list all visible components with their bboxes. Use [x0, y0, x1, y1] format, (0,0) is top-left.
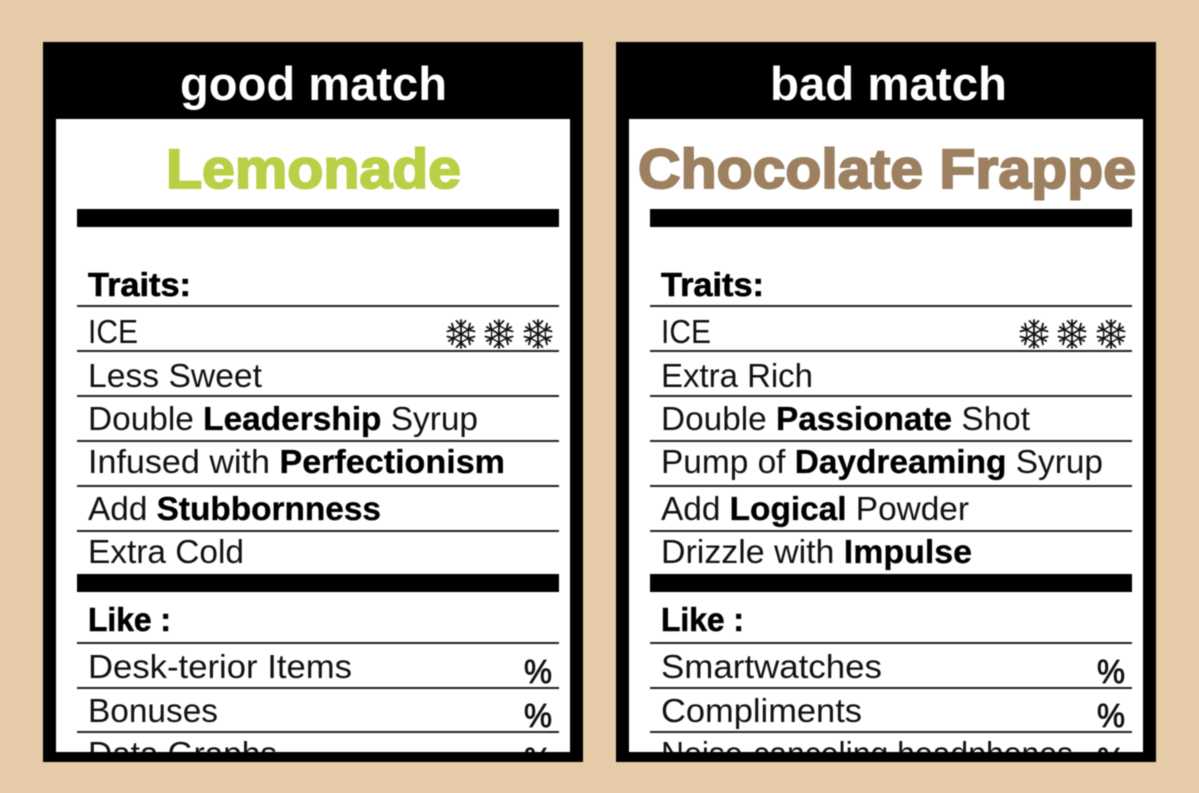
traits rules [650, 306, 1132, 531]
panel background [629, 119, 1143, 752]
like list [649, 606, 1133, 753]
panel frame [616, 42, 1156, 762]
traits list [77, 266, 559, 570]
percent sign row 1: % [524, 653, 552, 690]
like list [76, 606, 560, 753]
traits rules [77, 306, 559, 531]
panel: good match [43, 42, 583, 778]
traits heading: Traits: [88, 266, 191, 303]
panel background [56, 119, 570, 752]
trait: Drizzle with Impulse: Drizzle with Impulse [661, 533, 972, 570]
drink name: Lemonade: Lemonade [166, 137, 461, 200]
like: Noise-canceling headphones: Noise-canceling headphones [661, 735, 1073, 772]
like rules [77, 643, 559, 732]
trait: Extra Cold: Extra Cold [88, 533, 244, 570]
trait: Double Leadership Syrup: Double Leadership Syrup [88, 400, 478, 437]
percent sign row 3: % [524, 741, 552, 778]
trait: Pump of Daydreaming Syrup: Pump of Daydreaming Syrup [661, 443, 1103, 480]
trait: ICE: ICE [88, 313, 138, 350]
divider bar top [77, 209, 559, 227]
trait: Less Sweet: Less Sweet [88, 357, 262, 394]
trait: Infused with Perfectionism: Infused with Perfectionism [88, 443, 505, 480]
percent sign row 2: % [524, 697, 552, 734]
like heading: Like : [88, 601, 171, 638]
trait: ICE: ICE [661, 313, 711, 350]
heading: good match: good match [180, 57, 447, 110]
like: Data Graphs: Data Graphs [88, 735, 277, 772]
divider bar middle [650, 574, 1132, 592]
trait: Add Stubbornness: Add Stubbornness [88, 490, 381, 527]
icon: three snowflakes [447, 320, 552, 348]
traits list [650, 266, 1132, 570]
like: Desk-terior Items: Desk-terior Items [88, 648, 352, 685]
percent sign row 3: % [1097, 741, 1125, 778]
like: Smartwatches: Smartwatches [661, 648, 882, 685]
panel frame [43, 42, 583, 762]
percent sign row 1: % [1097, 653, 1125, 690]
drink name: Chocolate Frappe: Chocolate Frappe [638, 137, 1136, 200]
icon: three snowflakes [1020, 320, 1125, 348]
like rules [650, 643, 1132, 732]
like heading: Like : [661, 601, 744, 638]
heading: bad match: bad match [770, 57, 1007, 110]
like: Compliments: Compliments [661, 692, 862, 729]
trait: Extra Rich: Extra Rich [661, 357, 813, 394]
percent sign row 2: % [1097, 697, 1125, 734]
trait: Double Passionate Shot: Double Passionate Shot [661, 400, 1030, 437]
like: Bonuses: Bonuses [88, 692, 218, 729]
traits heading: Traits: [661, 266, 764, 303]
divider bar middle [77, 574, 559, 592]
divider bar top [650, 209, 1132, 227]
trait: Add Logical Powder: Add Logical Powder [661, 490, 969, 527]
panel: bad match [616, 42, 1156, 778]
